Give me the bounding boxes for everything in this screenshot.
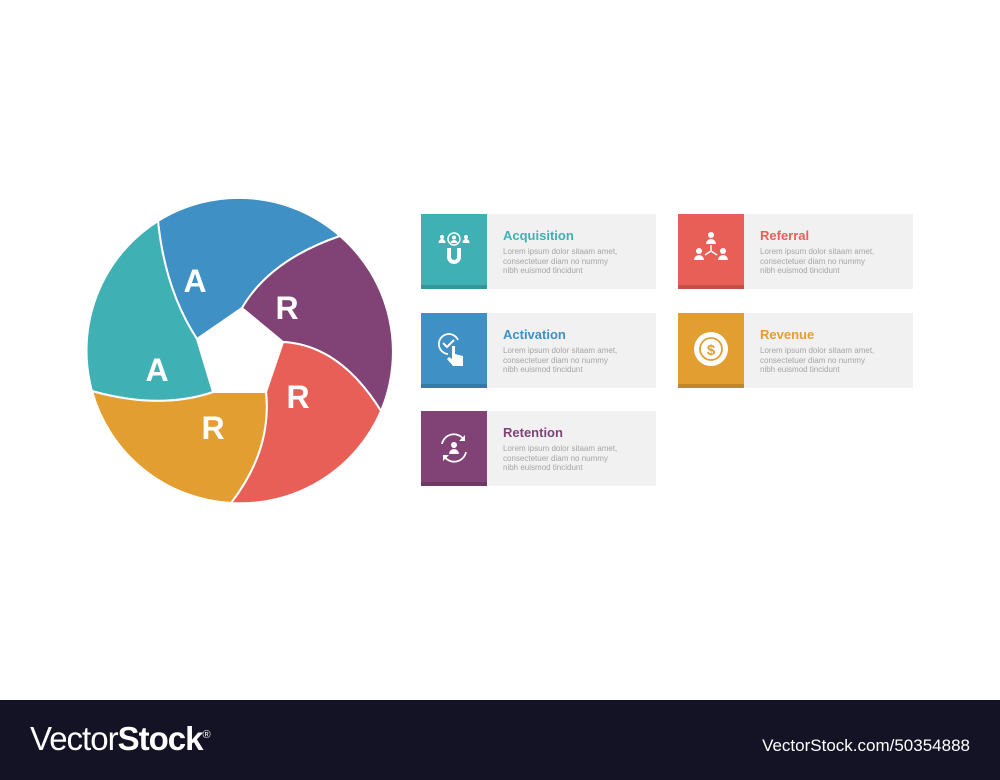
card: Activation: Activation xyxy=(503,327,566,342)
ARRR pie cycle chart: R xyxy=(275,290,299,326)
card: Acquisition xyxy=(421,214,656,289)
ARRR pie cycle chart xyxy=(88,198,392,502)
card: Activation xyxy=(421,313,656,388)
icon: coin: $ xyxy=(707,342,716,359)
footer bar xyxy=(0,700,1000,780)
icon: magnet users xyxy=(421,214,487,289)
card: Referral: Referral xyxy=(760,228,809,243)
card: Retention: Retention xyxy=(503,425,563,440)
card: Acquisition: Lorem ipsum dolor sitaam amet, xyxy=(503,247,617,256)
card: Revenue: consectetuer diam no nummy xyxy=(760,356,865,365)
card: Referral xyxy=(678,214,913,289)
card: Revenue: Revenue xyxy=(760,327,814,342)
icon: cycle user xyxy=(421,411,487,486)
icon: network people xyxy=(678,214,744,289)
card: Activation: consectetuer diam no nummy xyxy=(503,356,608,365)
card: Retention: Lorem ipsum dolor sitaam amet, xyxy=(503,444,617,453)
card: Acquisition: consectetuer diam no nummy xyxy=(503,257,608,266)
card: Revenue: Lorem ipsum dolor sitaam amet, xyxy=(760,346,874,355)
ARRR pie cycle chart: A xyxy=(183,263,207,299)
segment: acquisition A xyxy=(158,198,340,339)
card: Referral: consectetuer diam no nummy xyxy=(760,257,865,266)
footer url: VectorStock.com/50354888 xyxy=(762,736,970,755)
segment: activation A xyxy=(87,221,213,401)
segment: retention R xyxy=(92,391,267,503)
segment: referral R xyxy=(242,236,393,411)
footer logo: VectorStock® xyxy=(30,720,210,757)
card: Retention: consectetuer diam no nummy xyxy=(503,454,608,463)
card: Retention: nibh euismod tincidunt xyxy=(503,463,583,472)
segment: revenue R xyxy=(231,342,381,503)
icon: coin xyxy=(678,313,744,388)
icon: check hand xyxy=(421,313,487,388)
card: Revenue xyxy=(678,313,913,388)
ARRR pie cycle chart: A xyxy=(145,352,169,388)
card: Revenue: nibh euismod tincidunt xyxy=(760,365,840,374)
card: Activation: Lorem ipsum dolor sitaam amet, xyxy=(503,346,617,355)
ARRR pie cycle chart: R xyxy=(286,379,310,415)
card: Acquisition: nibh euismod tincidunt xyxy=(503,266,583,275)
card: Acquisition: Acquisition xyxy=(503,228,574,243)
card: Referral: nibh euismod tincidunt xyxy=(760,266,840,275)
card: Referral: Lorem ipsum dolor sitaam amet, xyxy=(760,247,874,256)
card: Activation: nibh euismod tincidunt xyxy=(503,365,583,374)
ARRR pie cycle chart: R xyxy=(201,410,225,446)
card: Retention xyxy=(421,411,656,486)
